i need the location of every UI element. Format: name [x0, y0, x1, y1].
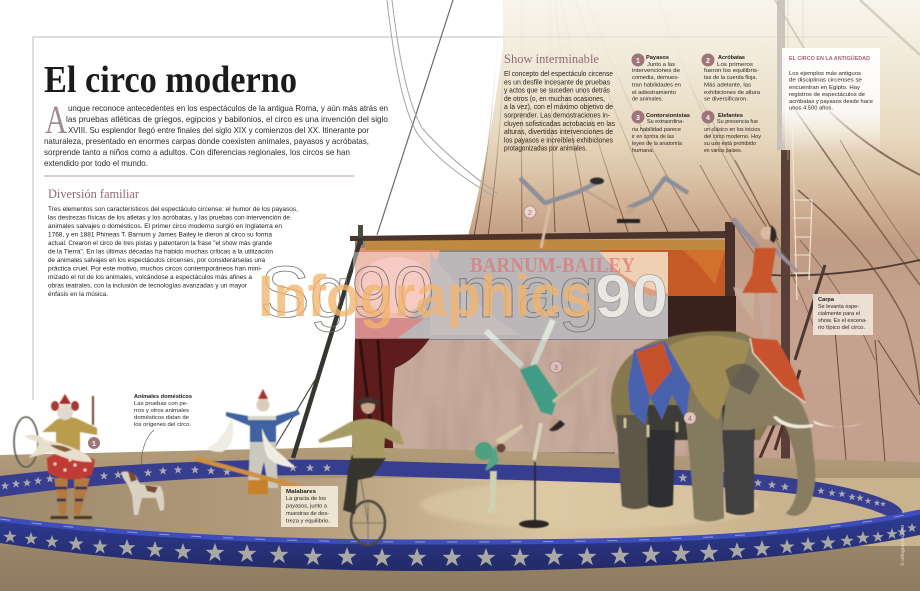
callout 1: Payasos [632, 54, 681, 102]
callout 2: Acróbatas: exhibiciones de altura [704, 90, 761, 96]
body text: Show interminable: a la vez), con el máximo objetivo de [504, 104, 613, 111]
body text: Diversión familiar: las destrezas físicas de los atletas y los acróbatas, y las pruebas con intervención de [48, 214, 290, 222]
marker 4 [684, 412, 696, 424]
intro text: las pruebas atléticas de griegos, egipcios y babilonios, el circo es una invención del siglo [66, 115, 388, 124]
panel: El circo en la antigüedad: registros de espectáculos de [789, 92, 865, 98]
callout: Animales domésticos: domésticos datan de [134, 415, 189, 421]
callout 1: Payasos: tran habilidades en [632, 82, 681, 88]
illustration: dancer on elephant [730, 217, 798, 337]
callout 2: Acróbatas: Los primeros [717, 62, 753, 68]
intro drop cap: A [45, 97, 67, 142]
callout: Carpa: Carpa [818, 297, 835, 303]
callout 3: Contorsionistas: 3 [636, 115, 640, 122]
watermark: BARNUM-BAILEY [470, 253, 635, 277]
ring front [0, 510, 920, 571]
callout 1: Payasos: Payasos [646, 55, 669, 61]
panel: El circo en la antigüedad: encuentran en Egipto. Hay [789, 85, 860, 91]
callout: Carpa: rio típico del circo. [818, 325, 865, 331]
callout 1: Payasos: de animales. [632, 96, 663, 102]
body text: Show interminable [504, 71, 616, 153]
callout 2: Acróbatas: Más adelante, las [704, 82, 751, 88]
callout 4: Elefantes: un clásico en los inicios [704, 127, 760, 133]
illustration: dog [121, 472, 164, 515]
curtain floor shadow [385, 452, 615, 457]
marker 1: 1 [92, 441, 96, 448]
callout 2: Acróbatas: 2 [706, 58, 710, 65]
illustration: unicyclist [318, 397, 404, 545]
body text: Diversión familiar: énfasis en la música. [48, 291, 108, 298]
callout 1: Payasos: 1 [636, 58, 640, 65]
body text: Show interminable: es un desfile incesante de pruebas [504, 79, 611, 86]
body text: Diversión familiar: animales salvajes o domésticos. El primer circo moderno surgió en Inglaterra en [48, 223, 282, 230]
intro text: naturaleza, presentado en enormes carpas donde coexisten animales, payasos y acróbatas, [44, 137, 369, 146]
callout: Animales domésticos: Animales domésticos [134, 394, 192, 400]
illustration: contortionist [475, 424, 523, 513]
illustration: trapeze artists [520, 160, 703, 248]
panel: El circo en la antigüedad: de disciplinas circenses se [789, 78, 862, 84]
callout 3: Contorsionistas [632, 110, 690, 154]
pole and rope [275, 238, 361, 458]
frame line [33, 37, 887, 470]
callout: Malabares: treza y equilibrio. [286, 518, 330, 524]
body text: Diversión familiar: actual. Crearon el circo de tres pistas y patentaron la frase "el show más grande [48, 240, 272, 247]
body text: Show interminable: alturas, divertidas intervenciones de [504, 129, 613, 136]
callout 3: Contorsionistas: ir en contra de las [632, 134, 674, 140]
watermark: Sg90 mag [260, 253, 600, 333]
divider [44, 175, 354, 177]
guy ropes [377, 0, 498, 235]
callout: Animales domésticos: los orígenes del circo. [134, 422, 191, 428]
callout 1: Payasos: Junto a las [647, 62, 675, 68]
panel: El circo en la antigüedad: unos 4.500 años. [789, 106, 833, 112]
callout 4: Elefantes: Su presencia fue [717, 119, 758, 125]
body text: Diversión familiar: 1768, y en 1881 Phineas T. Barnum y James Bailey le dieron al circo su forma [48, 232, 272, 238]
body text: Show interminable: y actos que se suceden unos detrás [504, 88, 611, 95]
body text: Diversión familiar: de la Tierra". En las últimas décadas ha habido muchas críticas a la utilización [48, 248, 273, 256]
intro text: sorprende tanto a niños como a adultos. Con diferencias regionales, los circos se han [44, 148, 350, 157]
credit: © Infographics 90 [899, 524, 905, 566]
marker 3: 3 [554, 365, 558, 372]
illustration: clown with geese and seesaw [195, 389, 310, 494]
panel: El circo en la antigüedad: acróbatas y payasos desde hace [789, 99, 873, 105]
mast and struts [757, 0, 812, 470]
callout 3: Contorsionistas: leyes de la anatomía [632, 141, 683, 147]
callout: Animales domésticos [134, 394, 192, 465]
callout: Carpa: show. Es el escena- [818, 318, 867, 324]
marker 3 [550, 361, 562, 373]
illustration: clown with hoop and dog [14, 394, 97, 519]
callout 4: Elefantes [702, 110, 761, 154]
body text: Diversión familiar: Tres elementos son característicos del espectáculo circense: el humor de los payasos, [48, 206, 298, 213]
callout 4: Elefantes: del circo moderno. Hoy [704, 134, 761, 140]
panel: El circo en la antigüedad: EL CIRCO EN LA ANTIGÜEDAD [789, 55, 870, 62]
intro text: extendido por todo el mundo. [44, 159, 148, 168]
callout 3: Contorsionistas: Contorsionistas [646, 113, 690, 119]
callout 2: Acróbatas [702, 54, 761, 102]
callout 1: Payasos: el adiestramiento [632, 90, 676, 96]
stage and backdrop [350, 222, 736, 458]
callout 4: Elefantes: en varios países. [704, 148, 742, 154]
drapery [385, 340, 685, 458]
callout: Malabares: muestras de des- [286, 511, 329, 517]
illustration: elephant [611, 331, 867, 522]
body text: Show interminable: de otros (o, en muchas ocasiones, [504, 96, 605, 103]
back ring [0, 460, 902, 520]
callout: Malabares [281, 486, 338, 527]
callout: Malabares: Malabares [286, 489, 316, 495]
callout 2: Acróbatas: tas de la cuerda floja. [704, 75, 757, 81]
callout 2: Acróbatas: se diversificaron. [704, 96, 748, 102]
callout 3: Contorsionistas: ria habilidad parece [632, 127, 681, 133]
callout: Animales domésticos: rros y otros animales [134, 408, 189, 414]
panel: El circo en la antigüedad [782, 48, 880, 153]
heading: Diversión familiar: Diversión familiar [48, 186, 140, 201]
callout 2: Acróbatas: Acróbatas [718, 55, 745, 61]
callout 4: Elefantes: su uso está prohibido [704, 141, 756, 147]
floor [0, 447, 920, 591]
body text: Diversión familiar [48, 206, 298, 298]
intro text: unque reconoce antecedentes en los espectáculos de la antigua Roma, y aún más atrás en [68, 104, 388, 113]
body text: Show interminable: los payasos e increíbles exhibiciones [504, 137, 614, 144]
body text: Show interminable: cluyen sofisticadas acrobacias en las [504, 121, 616, 128]
callout 3: Contorsionistas: humana. [632, 148, 654, 154]
callout: Carpa: cialmente para el [818, 311, 860, 317]
callout 1: Payasos: comedia, demues- [632, 75, 679, 81]
body text: Diversión familiar: práctica cruel. Por este motivo, muchos circos contemporáneos han mini- [48, 266, 262, 272]
rope ladder [788, 0, 812, 300]
heading: Show interminable: Show interminable [504, 51, 599, 66]
marker 2 [524, 206, 536, 218]
body text: Show interminable: sorprender. Las demostraciones in- [504, 112, 610, 120]
intro text: XVIII. Su esplendor llegó entre finales del siglo XIX y comienzos del XX. Itinerante por [68, 126, 369, 135]
body text: Show interminable: protagonizadas por animales. [504, 146, 587, 153]
body text: Show interminable: El concepto del espectáculo circense [504, 71, 613, 78]
marker 4: 4 [688, 416, 692, 423]
body text: Diversión familiar: obras teatrales, con la inclusión de tecnologías avanzadas y un mayor [48, 282, 248, 290]
marker 2: 2 [528, 210, 532, 217]
panel: El circo en la antigüedad: Los ejemplos más antiguos [789, 71, 861, 77]
watermark: Infographics [258, 264, 592, 329]
tent canopy [33, 0, 920, 470]
callout: Animales domésticos: Las pruebas con pe- [134, 401, 188, 407]
callout 4: Elefantes: 4 [706, 115, 710, 122]
callout 4: Elefantes: Elefantes [718, 113, 743, 119]
callout: Malabares: La gracia de los [286, 496, 326, 502]
title: El circo moderno [44, 59, 297, 101]
illustration: handstand acrobat on pole [486, 320, 597, 528]
callout 1: Payasos: intervenciones de [632, 68, 680, 74]
marker 1 [88, 437, 100, 449]
body text: Diversión familiar: mizado el rol de los animales, volcándose a espectáculos más afines a [48, 274, 252, 281]
callout: Malabares: payasos, junto a [286, 504, 328, 510]
callout 3: Contorsionistas: Su extraordina- [647, 119, 684, 125]
callout 2: Acróbatas: fueron los equilibris- [704, 68, 759, 74]
red curtain [352, 338, 430, 458]
intro text [44, 104, 388, 168]
watermark: 90 [595, 263, 668, 330]
callout: Carpa [813, 294, 873, 335]
callout: Carpa: Se levanta espe- [818, 304, 859, 310]
body text: Diversión familiar: de animales salvajes en los espectáculos circenses, por considerárselas una [48, 257, 265, 264]
